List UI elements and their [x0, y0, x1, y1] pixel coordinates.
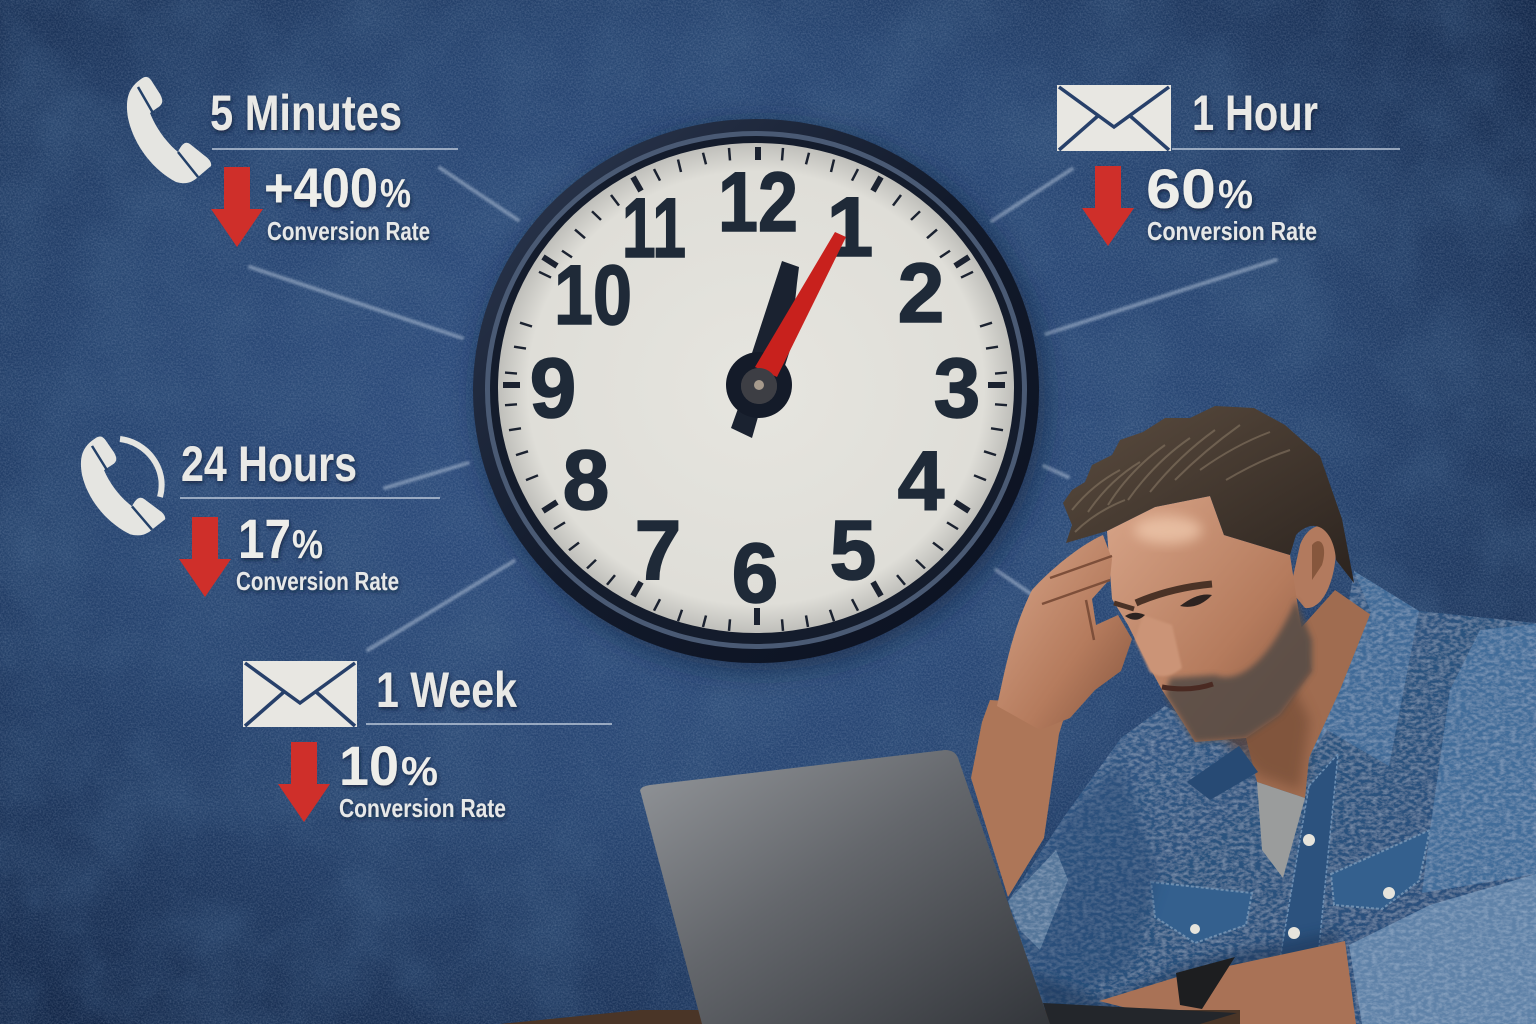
shirt torso: [1008, 571, 1536, 1024]
minute ticks: [505, 148, 1007, 631]
clock numerals: [530, 155, 980, 620]
value: [339, 734, 438, 797]
clock rim: [473, 119, 1039, 663]
hour ticks: [503, 147, 1005, 625]
clock numerals: 12: [718, 155, 798, 249]
icon: envelope: [243, 661, 357, 727]
hour hand: [731, 261, 799, 438]
shirt snaps: [1190, 834, 1395, 939]
icon: phone: [127, 77, 211, 183]
clock numerals: 7: [635, 503, 681, 597]
resting forearm: [1099, 941, 1356, 1024]
laptop keyboard edge: [1043, 1003, 1237, 1024]
icon: phone with ring: [81, 436, 165, 535]
label: Conversion Rate: [236, 566, 399, 596]
callout: 24 hours: [81, 436, 440, 597]
raised forearm: [971, 700, 1068, 897]
label: Conversion Rate: [1147, 216, 1317, 246]
rolled left cuff: [1008, 850, 1068, 950]
value: %: [292, 521, 323, 567]
placket: [1270, 754, 1338, 1024]
clock pivot: [741, 368, 777, 404]
clock: [473, 119, 1045, 670]
clock numerals: 10: [554, 248, 632, 342]
clock numerals: 1: [827, 180, 873, 274]
eyes and brows: [1114, 584, 1212, 620]
ear: [1290, 526, 1336, 608]
nose: [1135, 615, 1182, 676]
finger lines: [1042, 556, 1112, 640]
right collar: [1309, 571, 1419, 766]
hair strands: [1072, 425, 1290, 532]
value: 17: [238, 507, 291, 570]
hand on forehead: [997, 535, 1132, 730]
heading: 5 Minutes: [210, 85, 402, 141]
clock numerals: 11: [622, 181, 686, 275]
icon: down arrow: [278, 742, 330, 822]
laptop: [500, 750, 1240, 1024]
mouth: [1162, 684, 1213, 689]
value: %: [1218, 171, 1253, 217]
callout: 5 minutes: [127, 77, 458, 247]
heading: 1 Week: [376, 662, 517, 718]
left sleeve shading: [1008, 760, 1160, 1010]
lower shirt shadow: [1030, 930, 1340, 1024]
icon: down arrow: [179, 517, 231, 597]
callout: 1 hour: [1057, 85, 1400, 246]
clock numerals: 4: [898, 434, 945, 528]
minute hand red: [755, 232, 846, 377]
head: [1107, 496, 1312, 742]
clock numerals: 2: [898, 246, 944, 340]
label: Conversion Rate: [339, 793, 506, 823]
clock numerals: 6: [732, 526, 778, 620]
heading: 24 Hours: [181, 436, 357, 492]
rays radiating from clock: [250, 168, 1276, 650]
chest pockets: [1151, 830, 1430, 943]
clock shadow: [479, 126, 1045, 670]
rolled cuff on right arm: [1349, 874, 1536, 1024]
value: [1146, 157, 1253, 220]
icon: down arrow: [211, 167, 263, 247]
value: +400: [264, 156, 378, 219]
right sleeve: [1422, 624, 1536, 893]
forehead highlight: [1134, 516, 1202, 544]
hair: [1063, 406, 1354, 583]
left collar: [1187, 746, 1258, 800]
value: 10: [339, 734, 399, 797]
beard: [1165, 600, 1312, 742]
clock numerals: 3: [934, 341, 980, 435]
value: %: [380, 170, 411, 216]
wristwatch: [1176, 957, 1235, 1009]
value: %: [401, 748, 438, 794]
laptop lid: [640, 750, 1050, 1024]
table: [500, 1010, 1240, 1024]
neck: [1180, 590, 1371, 798]
clock numerals: 5: [830, 503, 876, 597]
clock hub: [726, 352, 792, 418]
clock face: [498, 143, 1014, 633]
callout: 1 week: [243, 661, 612, 823]
clock numerals: 9: [530, 341, 576, 435]
label: Conversion Rate: [267, 216, 430, 246]
clock numerals: 8: [563, 433, 609, 527]
icon: down arrow: [1082, 166, 1134, 246]
icon: envelope: [1057, 85, 1171, 151]
man at laptop: [971, 406, 1536, 1024]
grey tee: [1257, 782, 1305, 878]
neck shadow: [1220, 680, 1310, 790]
heading: 1 Hour: [1192, 85, 1318, 141]
value: 60: [1146, 157, 1216, 220]
